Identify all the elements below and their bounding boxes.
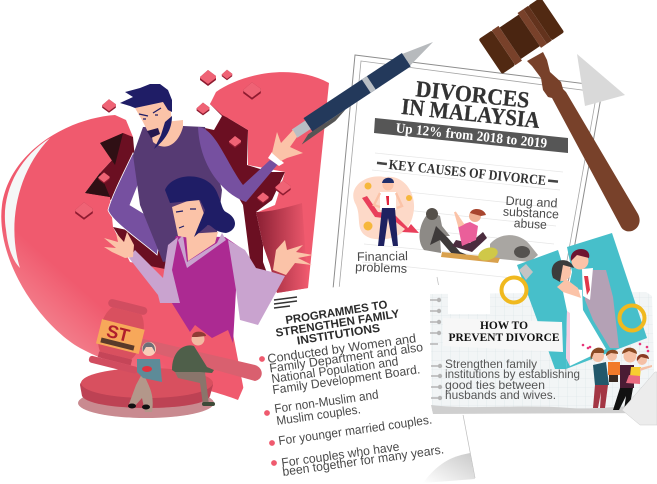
note heading (443, 318, 563, 352)
note background (430, 292, 655, 411)
heart crack interior lower left (113, 227, 175, 290)
photo left piece (517, 250, 569, 369)
small gavel with couple (78, 297, 262, 418)
hearts (582, 343, 649, 352)
woman eyes and mouth (176, 209, 196, 228)
woman (104, 176, 313, 343)
man face (135, 100, 172, 140)
note body text: Strengthen family (445, 357, 537, 371)
drug and substance abuse label (502, 194, 560, 232)
man hand (272, 130, 303, 161)
man left sleeve (108, 153, 163, 255)
key causes heading: KEY CAUSES OF DIVORCE (388, 158, 547, 189)
title: DIVORCES (415, 76, 531, 113)
bullet list: For younger married couples. (277, 413, 433, 448)
subtitle band: Up 12% from 2018 to 2019 (395, 121, 548, 152)
heart highlight (5, 138, 50, 268)
man cuff (268, 152, 284, 166)
gavel base (78, 368, 214, 418)
icon: gold rings (502, 278, 644, 330)
drug and substance abuse label: Drug and (505, 194, 558, 210)
note body text: husbands and wives. (445, 388, 556, 402)
heart left half (1, 115, 262, 400)
second paper: programmes (226, 277, 475, 484)
gavel handle (133, 337, 262, 381)
dark crack triangles (85, 133, 123, 197)
paper inner border (338, 61, 597, 300)
heading lines (274, 297, 297, 308)
gavel head: ST (104, 321, 132, 346)
bullet list: National Population and (270, 354, 399, 386)
pen clip shadow (299, 109, 348, 144)
woman left hand (104, 232, 134, 258)
bullet list: Conducted by Women and (266, 331, 417, 366)
son (608, 362, 620, 375)
note grid (430, 292, 655, 411)
mother (593, 362, 609, 385)
man torso (133, 126, 222, 262)
note spiral binding (430, 298, 442, 400)
father (620, 365, 634, 388)
how to prevent divorce note (430, 282, 655, 424)
heart right half (210, 72, 329, 293)
icon: happy family (582, 343, 652, 410)
heart crack interior left (85, 128, 135, 205)
pen grip (292, 121, 311, 138)
man (108, 84, 303, 262)
paper sheet (332, 55, 603, 300)
icon: substance abuse figures (420, 208, 538, 263)
main paper: divorces in Malaysia (332, 55, 603, 300)
broken heart (1, 72, 329, 400)
bullet list: Family Development Board. (271, 362, 421, 397)
man mouth (147, 128, 160, 138)
note body text (445, 357, 580, 402)
drug and substance abuse label: substance (503, 205, 559, 222)
woman top (168, 236, 244, 343)
programmes heading (275, 299, 401, 348)
pen (290, 35, 440, 144)
programmes heading: INSTITUTIONS (296, 322, 381, 348)
gavel handle (527, 52, 640, 231)
seated woman (128, 342, 162, 412)
woman left sleeve (129, 237, 180, 303)
man beard (154, 116, 172, 149)
bullet list: Muslim couples. (275, 402, 362, 428)
note white patch (448, 282, 490, 314)
bullet list: For couples who have (280, 440, 400, 470)
seated man (172, 332, 215, 406)
financial problems label: Financial (357, 249, 408, 264)
groom (571, 249, 619, 348)
man neck (150, 120, 183, 147)
ruled lines (362, 153, 563, 282)
gavel head (479, 0, 564, 74)
title: IN MALAYSIA (400, 94, 541, 133)
note heading: HOW TO (480, 320, 528, 332)
paper behind note (430, 285, 565, 424)
woman hair (165, 176, 235, 237)
financial problems label line 2: problems (355, 260, 407, 276)
bullet list: Family Department and also (268, 340, 424, 375)
note body text: institutions by establishing (445, 367, 580, 381)
gavel head (88, 297, 153, 374)
heart fragments (75, 70, 291, 220)
man hair (120, 84, 172, 112)
note torn bottom (431, 405, 653, 414)
heart shaded lower right (256, 203, 308, 293)
woman collar (178, 233, 226, 268)
paper sheet (226, 277, 475, 484)
bullet list (259, 331, 445, 479)
torn wedding photo (517, 233, 647, 369)
title (400, 75, 543, 133)
photo right piece (566, 233, 647, 369)
note body text: good ties between (445, 378, 545, 392)
heart crack interior right (205, 95, 285, 295)
woman right sleeve (228, 240, 285, 325)
programmes heading: PROGRAMMES TO (285, 299, 388, 327)
man right sleeve (198, 127, 278, 202)
paper curl (423, 453, 475, 483)
drug and substance abuse label: abuse (514, 216, 547, 232)
woman face (172, 197, 208, 238)
pen band (362, 76, 376, 93)
programmes heading: STRENGTHEN FAMILY (275, 308, 401, 340)
man eyes (139, 108, 161, 119)
note corner fold (622, 372, 657, 425)
icon: financial problems man (353, 176, 419, 246)
bullet list: For non-Muslim and (273, 387, 379, 416)
paper corner arrow (577, 54, 625, 106)
pen body (304, 53, 411, 131)
woman right hand (273, 240, 313, 275)
woman neck and chest (186, 232, 218, 261)
bullet list: been together for many years. (281, 442, 445, 479)
large gavel (479, 0, 640, 231)
pen tip (402, 36, 437, 65)
icon: ring diamond (519, 264, 533, 280)
bride (552, 260, 606, 366)
note heading: PREVENT DIVORCE (448, 332, 560, 344)
paper right edge line (437, 277, 475, 478)
daughter (630, 367, 641, 377)
